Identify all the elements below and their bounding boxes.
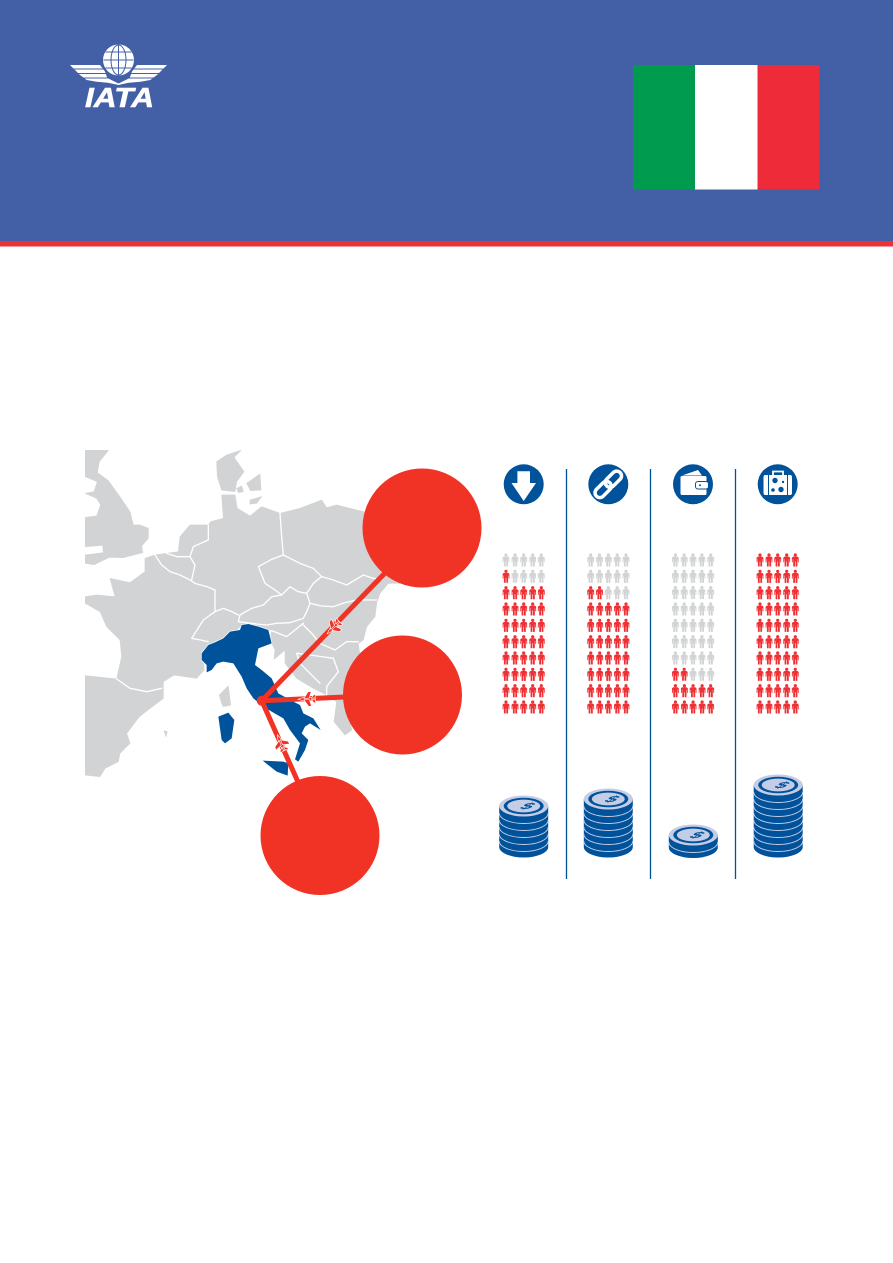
Italy highlighted — [202, 624, 321, 776]
coin stack 2: $ — [600, 794, 625, 804]
pictogram column 1 — [503, 553, 545, 714]
icon: wings — [70, 65, 167, 85]
red destination circle 1 — [362, 468, 482, 588]
logo wordmark: IATA — [85, 82, 154, 113]
coin stack 2 — [584, 788, 633, 858]
coin stack 4 — [754, 774, 803, 858]
icon: wallet — [673, 464, 713, 504]
red destination circle 3 — [260, 776, 380, 895]
pictogram column 2 — [587, 553, 629, 714]
coin stack 1: $ — [515, 801, 540, 811]
icon: plane south route — [271, 733, 291, 754]
route lines with planes — [257, 572, 386, 782]
flag of Italy — [633, 65, 820, 190]
coin stack 3: $ — [685, 830, 710, 840]
icon: plane north-east route — [323, 617, 344, 638]
landmass: grey countries — [85, 450, 400, 777]
icon: suitcase — [758, 464, 798, 504]
icon: globe — [102, 43, 136, 77]
IATA logo — [70, 43, 167, 113]
pictogram column 4 — [757, 553, 799, 714]
icon: plane east route — [299, 692, 316, 706]
pictogram column 3 — [672, 553, 714, 714]
map of Europe — [85, 450, 400, 777]
icon: down arrow — [504, 464, 544, 504]
red destination circle 2 — [343, 636, 462, 754]
coin stack 4: $ — [770, 780, 795, 790]
coin stack 3 — [669, 824, 718, 858]
icon: chain link — [588, 464, 628, 504]
coin stack 1 — [499, 796, 548, 858]
header band — [0, 0, 893, 246]
column dividers — [566, 469, 736, 879]
